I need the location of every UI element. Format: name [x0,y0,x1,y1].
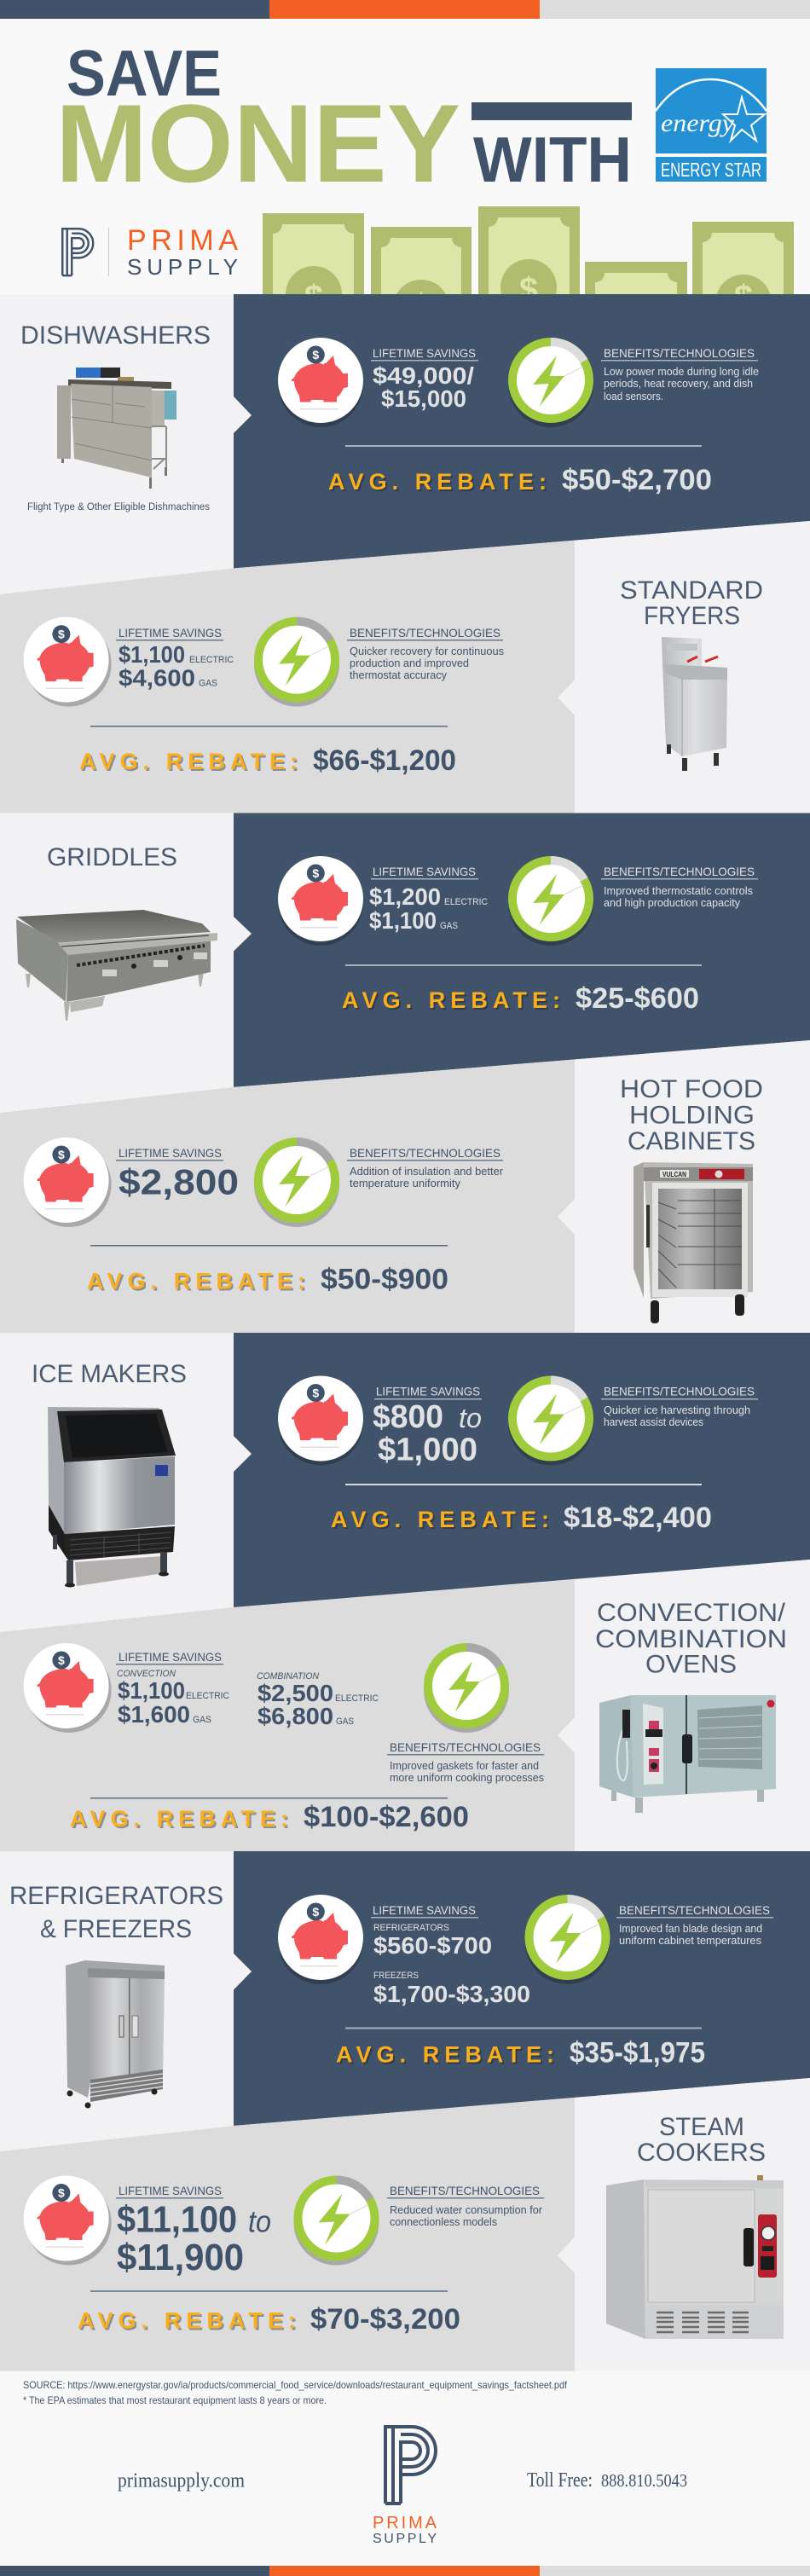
icon: piggy bank: $ [312,1386,319,1400]
benefits: Addition of insulation and better [350,1166,503,1178]
lifetime savings: $4,600 [119,665,195,691]
panel: ice makers [0,1333,810,1632]
website: primasupply.com [118,2469,245,2492]
heading [595,1599,787,1678]
benefits: Improved thermostatic controls [604,885,753,897]
lifetime savings: LIFETIME SAVINGS [376,1385,480,1398]
lifetime savings: LIFETIME SAVINGS [119,2184,222,2197]
lifetime savings: $11,100 [117,2198,237,2240]
icon: piggy bank: $ [312,866,319,880]
average rebate: AVG. REBATE: [78,2307,296,2333]
benefits: BENEFITS/TECHNOLOGIES [390,2184,540,2197]
lifetime savings: $1,100 [119,641,185,668]
bill 4 [585,262,687,298]
bill 3: $ [519,271,538,309]
lifetime savings [369,865,488,934]
combination savings: $6,800 [257,1703,333,1729]
combination savings: ELECTRIC [335,1693,379,1704]
heading: STANDARD [620,576,763,605]
heading: ICE MAKERS [32,1360,187,1388]
heading: CABINETS [628,1127,755,1155]
average rebate: $18-$2,400 [564,1502,712,1534]
lifetime savings: LIFETIME SAVINGS [119,1146,222,1160]
lifetime savings: LIFETIME SAVINGS [119,1650,222,1664]
average rebate [331,1502,712,1534]
phone number: Toll Free: [527,2469,593,2492]
icon: piggy bank: $ [312,348,319,362]
benefits [616,1903,773,1947]
icon: piggy bank [278,856,363,946]
lifetime savings: $1,200 [369,883,441,910]
benefits [387,1740,544,1784]
heading: COOKERS [637,2139,766,2167]
lifetime savings: $11,900 [117,2237,244,2278]
convection savings: $1,600 [118,1701,190,1728]
benefits: Quicker recovery for continuous [350,645,504,657]
benefits: thermostat accuracy [350,669,448,681]
benefits: Reduced water consumption for [390,2204,542,2216]
icon: lightning bolt [254,1137,339,1227]
energy star logo [656,68,767,182]
average rebate: AVG. REBATE: [79,749,298,774]
convection savings [117,1669,229,1728]
combination savings: GAS [336,1716,354,1727]
lifetime savings: LIFETIME SAVINGS [373,1903,476,1917]
icon: lightning bolt [508,856,593,946]
average rebate: AVG. REBATE: [328,469,547,495]
panel: refrigerators and freezers [0,1851,810,2151]
lifetime savings: $1,700-$3,300 [373,1981,530,2007]
icon: lightning bolt [508,338,593,427]
heading: HOLDING [629,1102,755,1129]
average rebate [336,2036,705,2069]
average rebate: $50-$900 [321,1264,448,1296]
image: holding cabinet: VULCAN [662,1170,686,1178]
benefits [387,2184,544,2228]
icon: piggy bank [278,338,363,427]
title [55,38,632,206]
icon: piggy bank [24,1137,112,1227]
image: griddle [16,910,217,1021]
panel: dishwashers [0,294,810,594]
lifetime savings: $49,000/ [373,362,474,389]
title word: money: MONEY [55,81,460,206]
benefits: production and improved [350,657,469,669]
benefits: temperature uniformity [350,1178,461,1190]
heading [637,2113,766,2167]
heading [620,576,763,630]
lifetime savings: $2,800 [119,1161,239,1202]
benefits: BENEFITS/TECHNOLOGIES [604,346,755,360]
footer logo: SUPPLY [373,2532,437,2546]
icon: piggy bank: $ [58,1148,65,1161]
icon: lightning bolt [525,1895,610,1984]
heading: OVENS [645,1651,737,1678]
benefits: BENEFITS/TECHNOLOGIES [604,1385,755,1398]
icon: piggy bank [278,1895,363,1984]
benefits [601,1385,758,1428]
image: combination oven [599,1695,776,1813]
combination savings [257,1671,379,1729]
prima supply logo: PRIMA [127,224,238,257]
icon: lightning bolt [293,2176,379,2265]
icon: lightning bolt [254,617,339,707]
benefits: BENEFITS/TECHNOLOGIES [350,1146,500,1160]
icon: piggy bank [24,617,112,707]
benefits: Low power mode during long idle [604,366,759,378]
heading: STEAM [659,2113,744,2141]
source notes [23,2379,568,2406]
lifetime savings: GAS [199,679,217,689]
average rebate [342,982,699,1015]
bill 5: $ [734,279,753,316]
benefits: uniform cabinet temperatures [619,1935,761,1947]
benefits [601,346,759,402]
prima supply logo [62,224,238,280]
average rebate [70,1801,469,1833]
average rebate [78,2303,460,2336]
combination savings: COMBINATION [257,1671,319,1682]
bill 2 [371,227,472,336]
lifetime savings: GAS [440,921,458,931]
lifetime savings [116,2184,271,2278]
caption: Flight Type & Other Eligible Dishmachines [27,502,210,512]
average rebate: $25-$600 [576,982,699,1015]
panel: hot food holding cabinets [0,1040,810,1333]
benefits: BENEFITS/TECHNOLOGIES [604,865,755,878]
image: refrigerator [66,1960,165,2108]
heading: REFRIGERATORS [9,1882,223,1910]
bill 1 [263,213,364,322]
benefits: and high production capacity [604,897,741,909]
average rebate [79,744,456,777]
average rebate: AVG. REBATE: [70,1806,288,1832]
source notes: SOURCE: https://www.energystar.gov/ia/products/commercial_food_service/downloads/restaurant_equipment_savings_factsheet.pdf [23,2379,568,2391]
footer logo [373,2427,437,2546]
convection savings: $1,100 [118,1677,185,1704]
convection savings: CONVECTION [117,1669,176,1679]
icon: piggy bank [278,1376,363,1465]
average rebate: $50-$2,700 [562,464,712,496]
image: fryer [662,637,727,771]
bill 3 [478,206,580,315]
heading [9,1882,223,1943]
benefits: Improved gaskets for faster and [390,1760,539,1772]
icon: piggy bank [24,1643,112,1733]
convection savings: ELECTRIC [186,1691,229,1701]
heading: GRIDDLES [47,843,177,871]
icon: piggy bank: $ [58,2186,65,2200]
benefits: BENEFITS/TECHNOLOGIES [350,626,500,640]
lifetime savings: LIFETIME SAVINGS [119,626,222,640]
icon: piggy bank: $ [58,628,65,641]
average rebate: AVG. REBATE: [336,2041,554,2067]
heading [620,1075,763,1155]
image: holding cabinet [634,1162,753,1323]
panel: convection and combination ovens [0,1560,810,1851]
lifetime savings [116,1146,239,1202]
average rebate: $66-$1,200 [313,744,456,777]
lifetime savings: LIFETIME SAVINGS [373,865,476,878]
footer logo: PRIMA [373,2514,437,2533]
image: ice maker [48,1407,176,1588]
heading: CONVECTION/ [597,1599,786,1627]
average rebate: $70-$3,200 [310,2303,460,2336]
heading: & FREEZERS [40,1915,192,1943]
average rebate: AVG. REBATE: [342,987,560,1013]
icon: piggy bank: $ [312,1905,319,1919]
bill 2: $ [412,287,431,325]
average rebate [87,1264,448,1296]
lifetime savings: LIFETIME SAVINGS [373,346,476,360]
heading: DISHWASHERS [20,321,211,350]
panel: steam cookers [0,2078,810,2370]
money bills [263,206,794,336]
average rebate: $100-$2,600 [304,1801,469,1833]
lifetime savings: FREEZERS [373,1971,419,1981]
heading: HOT FOOD [620,1075,763,1103]
benefits [601,865,758,909]
title bar and word: with: WITH [473,124,632,195]
bill 5 [692,222,794,331]
source notes: * The EPA estimates that most restaurant equipment lasts 8 years or more. [23,2394,327,2406]
lifetime savings: ELECTRIC [189,655,234,665]
lifetime savings: $15,000 [381,385,466,412]
combination savings: $2,500 [257,1680,333,1706]
lifetime savings: $1,000 [378,1433,477,1468]
benefits: Quicker ice harvesting through [604,1404,750,1416]
lifetime savings: $560-$700 [373,1932,492,1959]
lifetime savings [116,626,234,691]
prima supply logo: SUPPLY [127,254,238,280]
lifetime savings [373,1385,482,1468]
lifetime savings: to [248,2203,271,2238]
bill 1: $ [304,279,323,316]
benefits: load sensors. [604,391,663,402]
heading: COMBINATION [595,1625,787,1653]
image: dishwasher [57,368,176,489]
convection savings: GAS [193,1715,211,1725]
top colour bar [0,0,810,19]
benefits: BENEFITS/TECHNOLOGIES [619,1903,770,1917]
icon: piggy bank: $ [58,1653,65,1667]
lifetime savings: REFRIGERATORS [373,1923,449,1933]
icon: piggy bank [24,2176,112,2265]
heading: FRYERS [644,602,740,630]
lifetime savings: $800 [373,1399,443,1435]
title word: save: SAVE [67,38,222,110]
panel: standard fryers [0,521,810,813]
average rebate: $35-$1,975 [570,2036,705,2069]
image: steam cooker [606,2175,784,2339]
benefits [347,1146,503,1190]
benefits: harvest assist devices [604,1416,703,1428]
icon: lightning bolt [424,1643,509,1733]
average rebate [328,464,712,496]
panel: griddles [0,813,810,1113]
benefits: connectionless models [390,2216,497,2228]
icon: lightning bolt [508,1376,593,1465]
bottom colour bar [0,2566,810,2576]
benefits: Improved fan blade design and [619,1923,762,1935]
benefits: periods, heat recovery, and dish [604,378,753,390]
phone number: 888.810.5043 [601,2470,687,2491]
lifetime savings: $1,100 [369,907,437,934]
benefits: BENEFITS/TECHNOLOGIES [390,1740,541,1754]
average rebate: AVG. REBATE: [331,1507,549,1532]
average rebate: AVG. REBATE: [87,1269,305,1294]
benefits: more uniform cooking processes [390,1772,544,1784]
benefits [347,626,504,681]
energy star logo: energy [661,109,735,137]
lifetime savings [116,1650,379,1729]
lifetime savings: ELECTRIC [444,897,488,907]
phone number [527,2469,687,2492]
energy star logo: ENERGY STAR [661,159,761,181]
lifetime savings: to [459,1403,482,1433]
lifetime savings [371,1903,530,2007]
lifetime savings [371,346,478,412]
